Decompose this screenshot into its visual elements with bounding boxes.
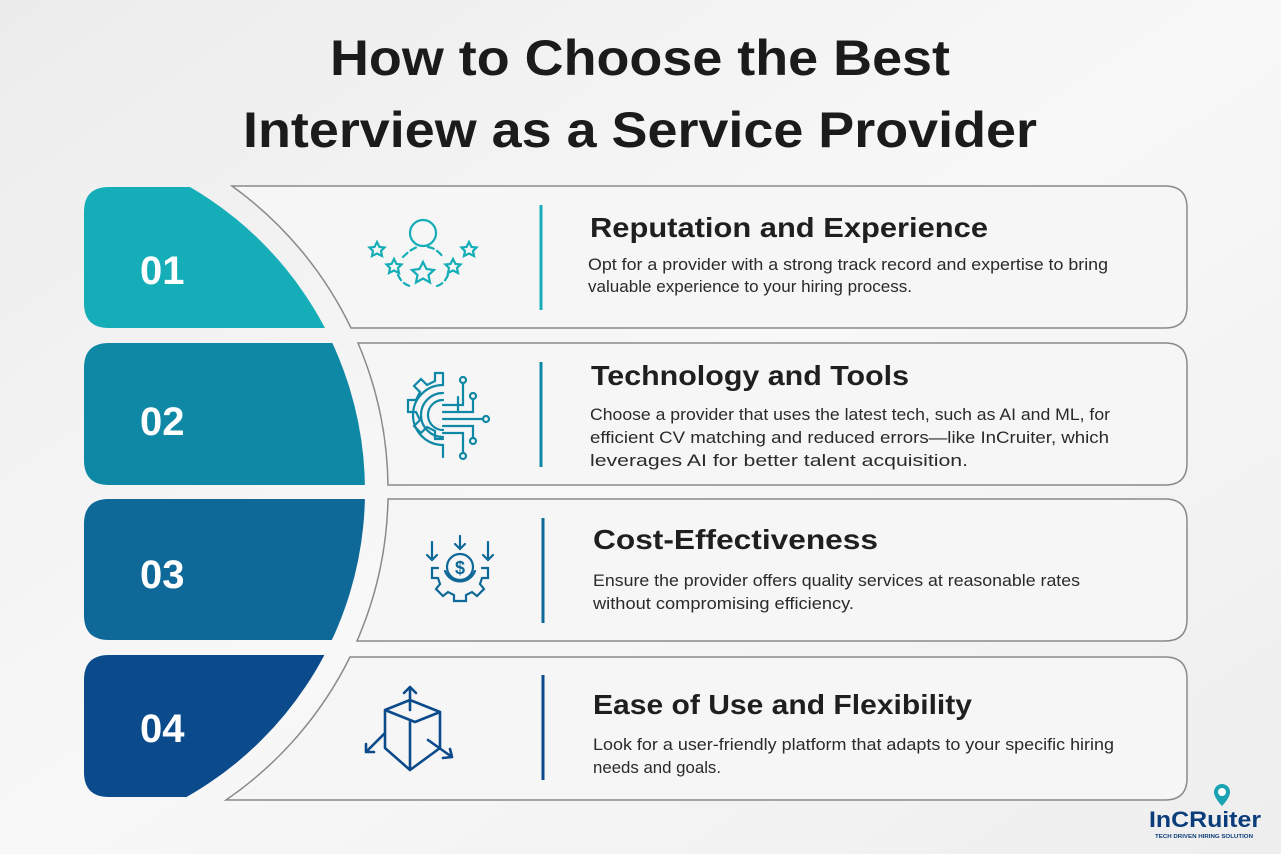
block 01: 01 [140,249,184,293]
card 3 [357,499,1187,641]
block 04: 04 [140,707,185,751]
heading 2: Technology and Tools [591,360,909,391]
card 4 [226,657,1187,800]
block 02 [84,343,365,485]
icon: box with arrows [366,687,452,770]
body 3: without compromising efficiency. [592,594,854,613]
title: Interview as a Service Provider [243,102,1037,158]
title: How to Choose the Best [330,30,950,86]
body 1: Opt for a provider with a strong track record and expertise to bring [588,255,1108,274]
card 1 [232,186,1187,328]
block 03: 03 [140,553,184,597]
icon: gear circuit [408,373,489,459]
body 3: Ensure the provider offers quality services at reasonable rates [593,571,1080,590]
body 3 [592,571,1080,613]
heading 3: Cost-Effectiveness [593,524,878,555]
body 2: leverages AI for better talent acquisition. [590,451,968,470]
title [243,30,1037,158]
number blocks [84,187,365,797]
heading 4: Ease of Use and Flexibility [593,689,972,720]
body 2: Choose a provider that uses the latest tech, such as AI and ML, for [590,405,1110,424]
logo [1149,784,1261,840]
heading 1: Reputation and Experience [590,212,988,243]
block 01 [84,187,325,328]
body 4: Look for a user-friendly platform that adapts to your specific hiring [593,735,1114,754]
body 2: efficient CV matching and reduced errors—like InCruiter, which [590,428,1109,447]
block 03 [84,499,365,640]
icon: person with stars [370,220,476,286]
body 1: valuable experience to your hiring process. [588,277,912,296]
body 4 [593,735,1114,777]
card 2 [358,343,1187,485]
logo: InCRuiter [1149,807,1261,832]
icon: dollar gear: $ [455,558,465,578]
logo: TECH DRIVEN HIRING SOLUTION [1155,834,1253,840]
body 4: needs and goals. [593,758,721,777]
body 1 [588,255,1108,296]
block 02: 02 [140,400,184,444]
icon: dollar gear [427,536,493,601]
block 04 [84,655,324,797]
body 2 [590,405,1110,470]
